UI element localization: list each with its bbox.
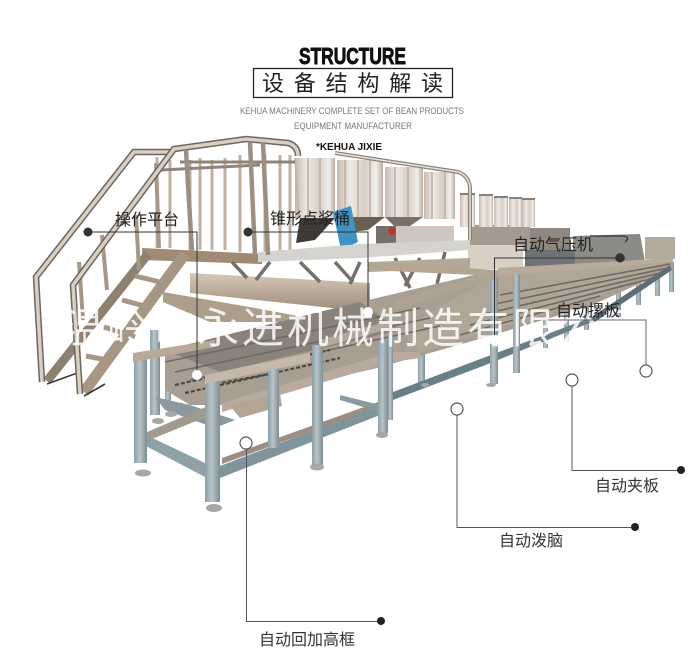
main chain conveyor deck	[165, 258, 674, 412]
callout: 自动气压机	[489, 236, 624, 345]
callout: 自动回加高框: 自动回加高框	[259, 631, 355, 649]
description text	[240, 106, 464, 131]
title: STRUCTURE: STRUCTURE	[299, 43, 406, 69]
platform deck and supports	[142, 240, 470, 322]
callout: 自动夹板	[566, 374, 685, 495]
large tanks with pipe	[295, 153, 470, 250]
brand mark: KEHUA JIXIE: *KEHUA JIXIE	[316, 142, 382, 153]
callout: 自动回加高框	[240, 437, 385, 649]
small tanks	[460, 194, 535, 227]
callout: 锥形点浆桶: 锥形点浆桶	[270, 210, 350, 228]
lower left tray and cross frame	[142, 394, 380, 478]
callout: 自动摞板	[548, 302, 652, 377]
adjustable feet	[135, 383, 496, 512]
far end machinery	[468, 225, 675, 269]
callout: 自动泼脑: 自动泼脑	[499, 532, 563, 550]
callout: 自动气压机: 自动气压机	[513, 236, 593, 254]
callout: 自动泼脑	[451, 403, 639, 550]
callout: 自动夹板: 自动夹板	[595, 477, 659, 495]
description text: EQUIPMENT MANUFACTURER	[294, 121, 412, 131]
callout: 自动摞板: 自动摞板	[556, 302, 620, 320]
callout: 锥形点浆桶	[244, 210, 373, 317]
subtitle box: 设备结构解读: 设备结构解读	[262, 71, 453, 96]
rear legs under conveyor	[150, 262, 674, 415]
callout: 操作平台	[84, 211, 202, 380]
front frame top rails	[133, 258, 673, 384]
platform guard rail bars	[157, 155, 295, 255]
watermark: 温岭市永进机械制造有限公司	[62, 305, 647, 352]
stair steps and stringers	[47, 163, 185, 396]
machine illustration: production line	[36, 139, 675, 512]
callout: 操作平台: 操作平台	[115, 211, 179, 229]
stair hand rails and top rail	[36, 139, 298, 394]
description text: KEHUA MACHINERY COMPLETE SET OF BEAN PRODUCTS	[240, 106, 464, 116]
front frame legs	[134, 272, 520, 502]
